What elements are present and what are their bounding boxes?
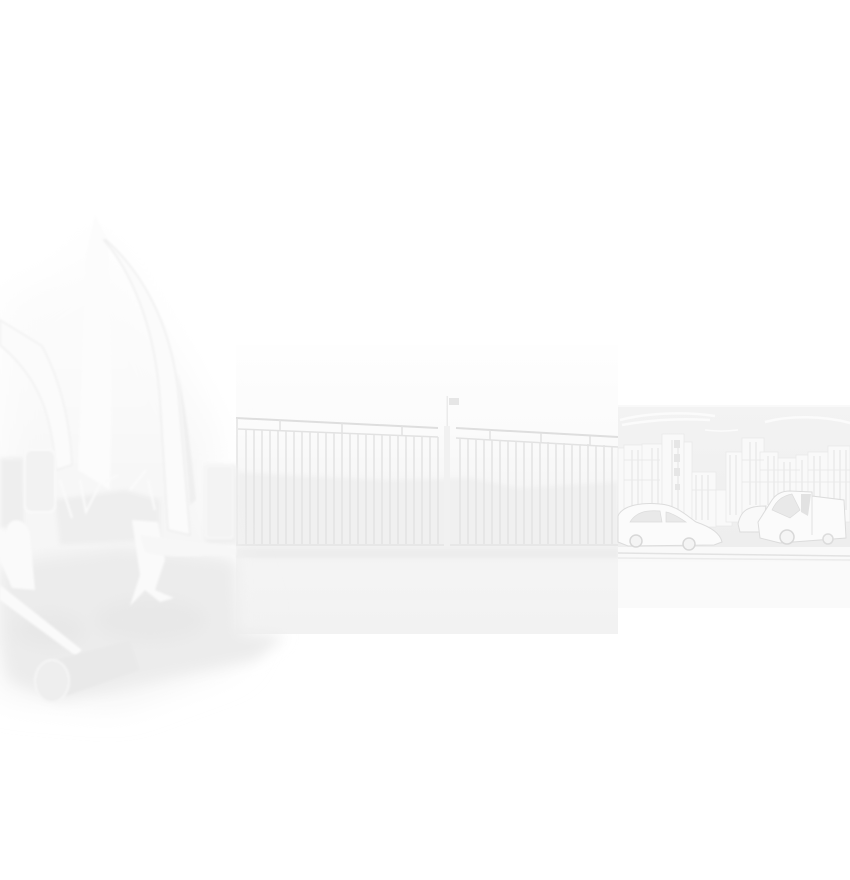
building window details <box>624 440 850 520</box>
clouds <box>620 413 850 431</box>
excavator cab <box>25 450 233 538</box>
window column on tower <box>674 440 680 490</box>
pavement strip <box>236 549 618 558</box>
panel: fence photo <box>236 345 618 634</box>
panel: city street illustration <box>618 405 850 608</box>
excavator arm: left <box>0 320 72 470</box>
gate post <box>444 426 450 554</box>
excavator bucket linkage <box>60 470 155 518</box>
panel: excavation site <box>0 190 286 702</box>
skyline buildings <box>618 434 850 527</box>
street panel base <box>618 405 850 608</box>
pipe diagonal <box>0 585 82 656</box>
soft haze <box>0 190 250 700</box>
pavement <box>618 562 850 608</box>
distant buildings band <box>236 472 618 548</box>
fence gates <box>236 418 618 545</box>
flag on pole <box>446 396 459 426</box>
car: distant vehicle <box>738 506 766 532</box>
ground soil mass <box>0 548 286 700</box>
excavator arm: main <box>78 215 196 535</box>
worker left <box>0 520 35 590</box>
track machine slab <box>140 535 236 557</box>
fence photo backdrop <box>236 345 618 634</box>
roadside barrier <box>618 553 850 560</box>
pipe on ground <box>35 640 140 702</box>
van <box>758 491 846 544</box>
sky <box>618 407 850 547</box>
car: sedan <box>618 504 722 550</box>
machine body shadows <box>0 458 237 545</box>
soil patches <box>15 598 205 648</box>
worker right <box>130 520 174 606</box>
